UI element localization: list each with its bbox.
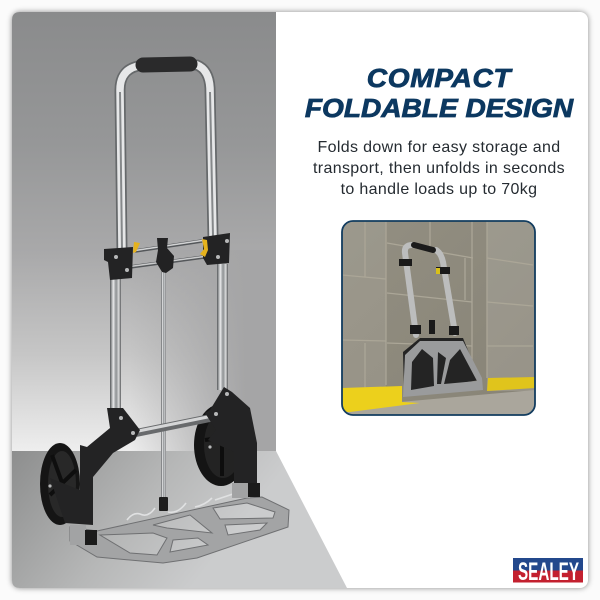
- inset dark backing behind plate: [403, 338, 480, 392]
- axle brackets: [70, 483, 260, 545]
- inset trolley plate: [403, 341, 483, 397]
- illustration: folding hand truck: [40, 64, 289, 563]
- hinge screws: [48, 392, 229, 488]
- scalloped back edge: [127, 490, 245, 520]
- yellow kerb right: [487, 377, 535, 391]
- description text: [313, 139, 565, 198]
- rod foot clip: [159, 497, 168, 511]
- bracket screws: [114, 239, 229, 272]
- inset grip: [414, 245, 433, 250]
- inset tubes: [405, 245, 455, 335]
- upper tube frame: [120, 65, 213, 250]
- inset photo: folded trolley against wall: [342, 221, 535, 415]
- inset clamps: [399, 259, 459, 335]
- yellow kerb left: [342, 386, 420, 412]
- right hinge and wheel guard: [205, 387, 257, 483]
- right clamp bracket: [203, 233, 230, 265]
- title: FOLDABLE DESIGN: [305, 93, 573, 123]
- left clamp bracket: [104, 247, 133, 280]
- description text: to handle loads up to 70kg: [341, 181, 537, 198]
- lower tubes: [110, 264, 228, 412]
- concrete block joints: [342, 221, 533, 388]
- right wheel: [194, 404, 248, 486]
- pavement: [342, 390, 535, 415]
- centre clamp: [156, 238, 174, 273]
- panel: grey studio backdrop: [12, 12, 347, 588]
- left hinge and wheel guard: [50, 408, 140, 525]
- left wheel: [40, 443, 80, 525]
- cross rods: [130, 240, 204, 267]
- centre rod: [161, 272, 166, 502]
- foam grip: [143, 64, 190, 65]
- crossbar: [136, 418, 210, 433]
- inset yellow latch: [436, 268, 440, 274]
- description text: transport, then unfolds in seconds: [313, 160, 565, 177]
- description text: Folds down for easy storage and: [318, 139, 560, 156]
- trolley base plate: [70, 497, 289, 563]
- yellow knobs: [133, 239, 208, 257]
- title: [304, 63, 574, 123]
- title: COMPACT: [367, 63, 511, 93]
- inset photo border: [342, 221, 535, 415]
